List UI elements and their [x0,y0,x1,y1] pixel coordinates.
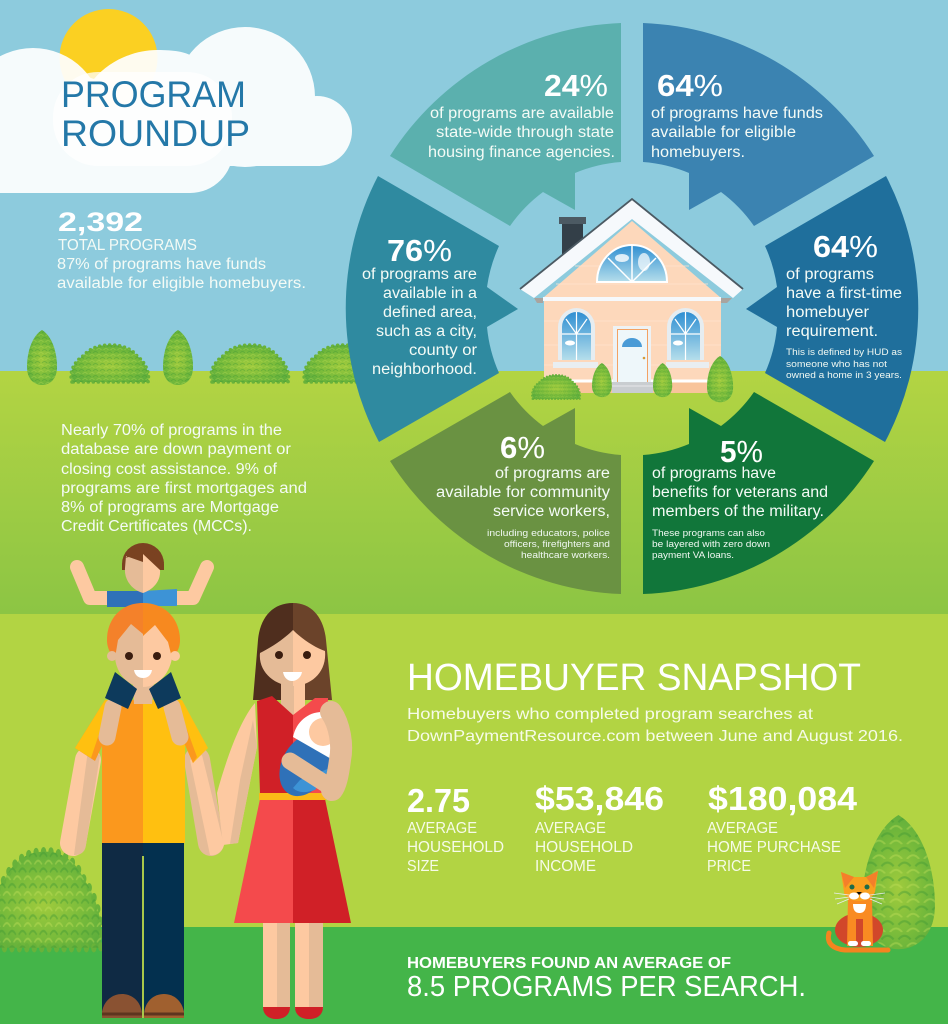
stat: household size [407,782,504,875]
title: ROUNDUP [61,113,250,154]
wheel panel: funds available: homebuyers. [651,144,745,161]
heading: homebuyer snapshot: HOMEBUYER SNAPSHOT [407,657,861,699]
wheel panel: defined area: county or [409,342,477,359]
wheel panel: funds available: available for eligible [651,124,796,141]
icon: big bush left [0,852,101,948]
wheel panel: first-time homebuyer: of programs [786,266,874,283]
down payment text block: 8% of programs are Mortgage [61,499,279,516]
wheel panel: defined area: available in a [383,285,477,302]
total programs text block: 87% of programs have funds [57,256,266,273]
wheel panel: funds available: of programs have funds [651,105,823,122]
down payment text block: programs are first mortgages and [61,480,307,497]
wheel panel: first-time homebuyer: owned a home in 3 years. [786,370,902,381]
wheel panel: defined area: neighborhood. [372,361,477,378]
snapshot description: DownPaymentResource.com between June and August 2016. [407,728,903,745]
wheel panel: veterans: 5% [720,434,763,469]
wheel panel: veterans: benefits for veterans and [652,484,828,501]
stat: household income: HOUSEHOLD [535,839,633,856]
wheel panel: veterans: payment VA loans. [652,550,734,561]
stat: purchase price [707,780,858,875]
icon: cat [828,871,888,950]
wheel panel: first-time homebuyer: have a first-time [786,285,902,302]
stat: purchase price: AVERAGE [707,820,778,837]
wheel panel: funds available [643,23,874,226]
wheel panel: first-time homebuyer: requirement. [786,323,878,340]
wheel panel: veterans: These programs can also [652,528,765,539]
icon: sun [60,9,158,107]
wheel panel: community service workers: service workers, [493,503,610,520]
stat: purchase price: $180,084 [708,780,858,817]
wheel panel: defined area: of programs are [362,266,477,283]
wheel panel: first-time homebuyer: someone who has not [786,359,887,370]
wheel panel: community service workers: of programs are [495,465,610,482]
down payment text block: database are down payment or [61,441,291,458]
wheel panel: first-time homebuyer: homebuyer [786,304,869,321]
stat: household size: SIZE [407,858,439,875]
wheel panel: first-time homebuyer [746,176,918,442]
icon: tall bush [862,815,935,949]
stat: household size: AVERAGE [407,820,477,837]
total programs text block: available for eligible homebuyers. [57,275,306,292]
wheel panel: veterans: members of the military. [652,503,824,520]
snapshot description [407,706,903,745]
wheel panel: first-time homebuyer: 64% [813,229,878,264]
down payment text block [61,422,307,535]
wheel panel: defined area: defined area, [383,304,477,321]
upper lawn [0,371,948,614]
wheel panel: state-wide: of programs are available [430,105,614,122]
wheel panel: veterans [643,392,874,594]
sky background [0,0,948,372]
stat: household income: $53,846 [535,780,664,817]
stat: purchase price: PRICE [707,858,751,875]
shrub row [27,330,381,385]
total programs text block: TOTAL PROGRAMS [58,237,197,254]
stat: household income: INCOME [535,858,596,875]
wheel panel: community service workers: 6% [500,430,545,465]
snapshot lawn [0,614,948,927]
figure: father [73,603,224,1018]
total programs text block: 2,392 [58,207,143,237]
wheel panel: defined area: such as a city, [376,323,477,340]
icon: baby [269,712,343,805]
stat: household income [535,780,664,875]
wheel panel: community service workers: including educators, police [487,528,610,539]
callout: programs per search: HOMEBUYERS FOUND AN AVERAGE OF [407,955,731,972]
figure: child on shoulders [77,543,207,607]
title [61,74,250,154]
total programs text block [57,207,306,292]
wheel panel: defined area: 76% [387,233,452,268]
wheel panel: state-wide: state-wide through state [436,124,614,141]
callout: programs per search: 8.5 PROGRAMS PER SEARCH. [407,971,806,1003]
callout: programs per search [407,955,806,1003]
down payment text block: Nearly 70% of programs in the [61,422,282,439]
wheel panel: defined area [346,176,518,442]
foreground grass [0,927,948,1024]
wheel panel: state-wide [390,23,621,226]
down payment text block: Credit Certificates (MCCs). [61,518,252,535]
title: PROGRAM [61,74,246,115]
wheel panel: community service workers [390,392,621,594]
wheel panel: veterans: of programs have [652,465,776,482]
wheel panel: funds available: 64% [657,68,723,103]
stat: household size: 2.75 [407,782,470,819]
icon: house [520,199,743,402]
figure: mother and baby [217,603,351,1019]
cloud [0,27,352,193]
stat: household income: AVERAGE [535,820,606,837]
wheel panel: community service workers: officers, firefighters and [504,539,610,550]
wheel panel: community service workers: available for community [436,484,610,501]
snapshot description: Homebuyers who completed program searches at [407,706,814,723]
wheel panel: community service workers: healthcare workers. [521,550,610,561]
stat: purchase price: HOME PURCHASE [707,839,841,856]
wheel panel: state-wide: housing finance agencies. [428,144,615,161]
down payment text block: closing cost assistance. 9% of [61,461,278,478]
wheel panel: state-wide: 24% [544,68,608,103]
wheel panel: veterans: be layered with zero down [652,539,770,550]
wheel panel: first-time homebuyer: This is defined by HUD as [786,347,902,358]
stat: household size: HOUSEHOLD [407,839,504,856]
